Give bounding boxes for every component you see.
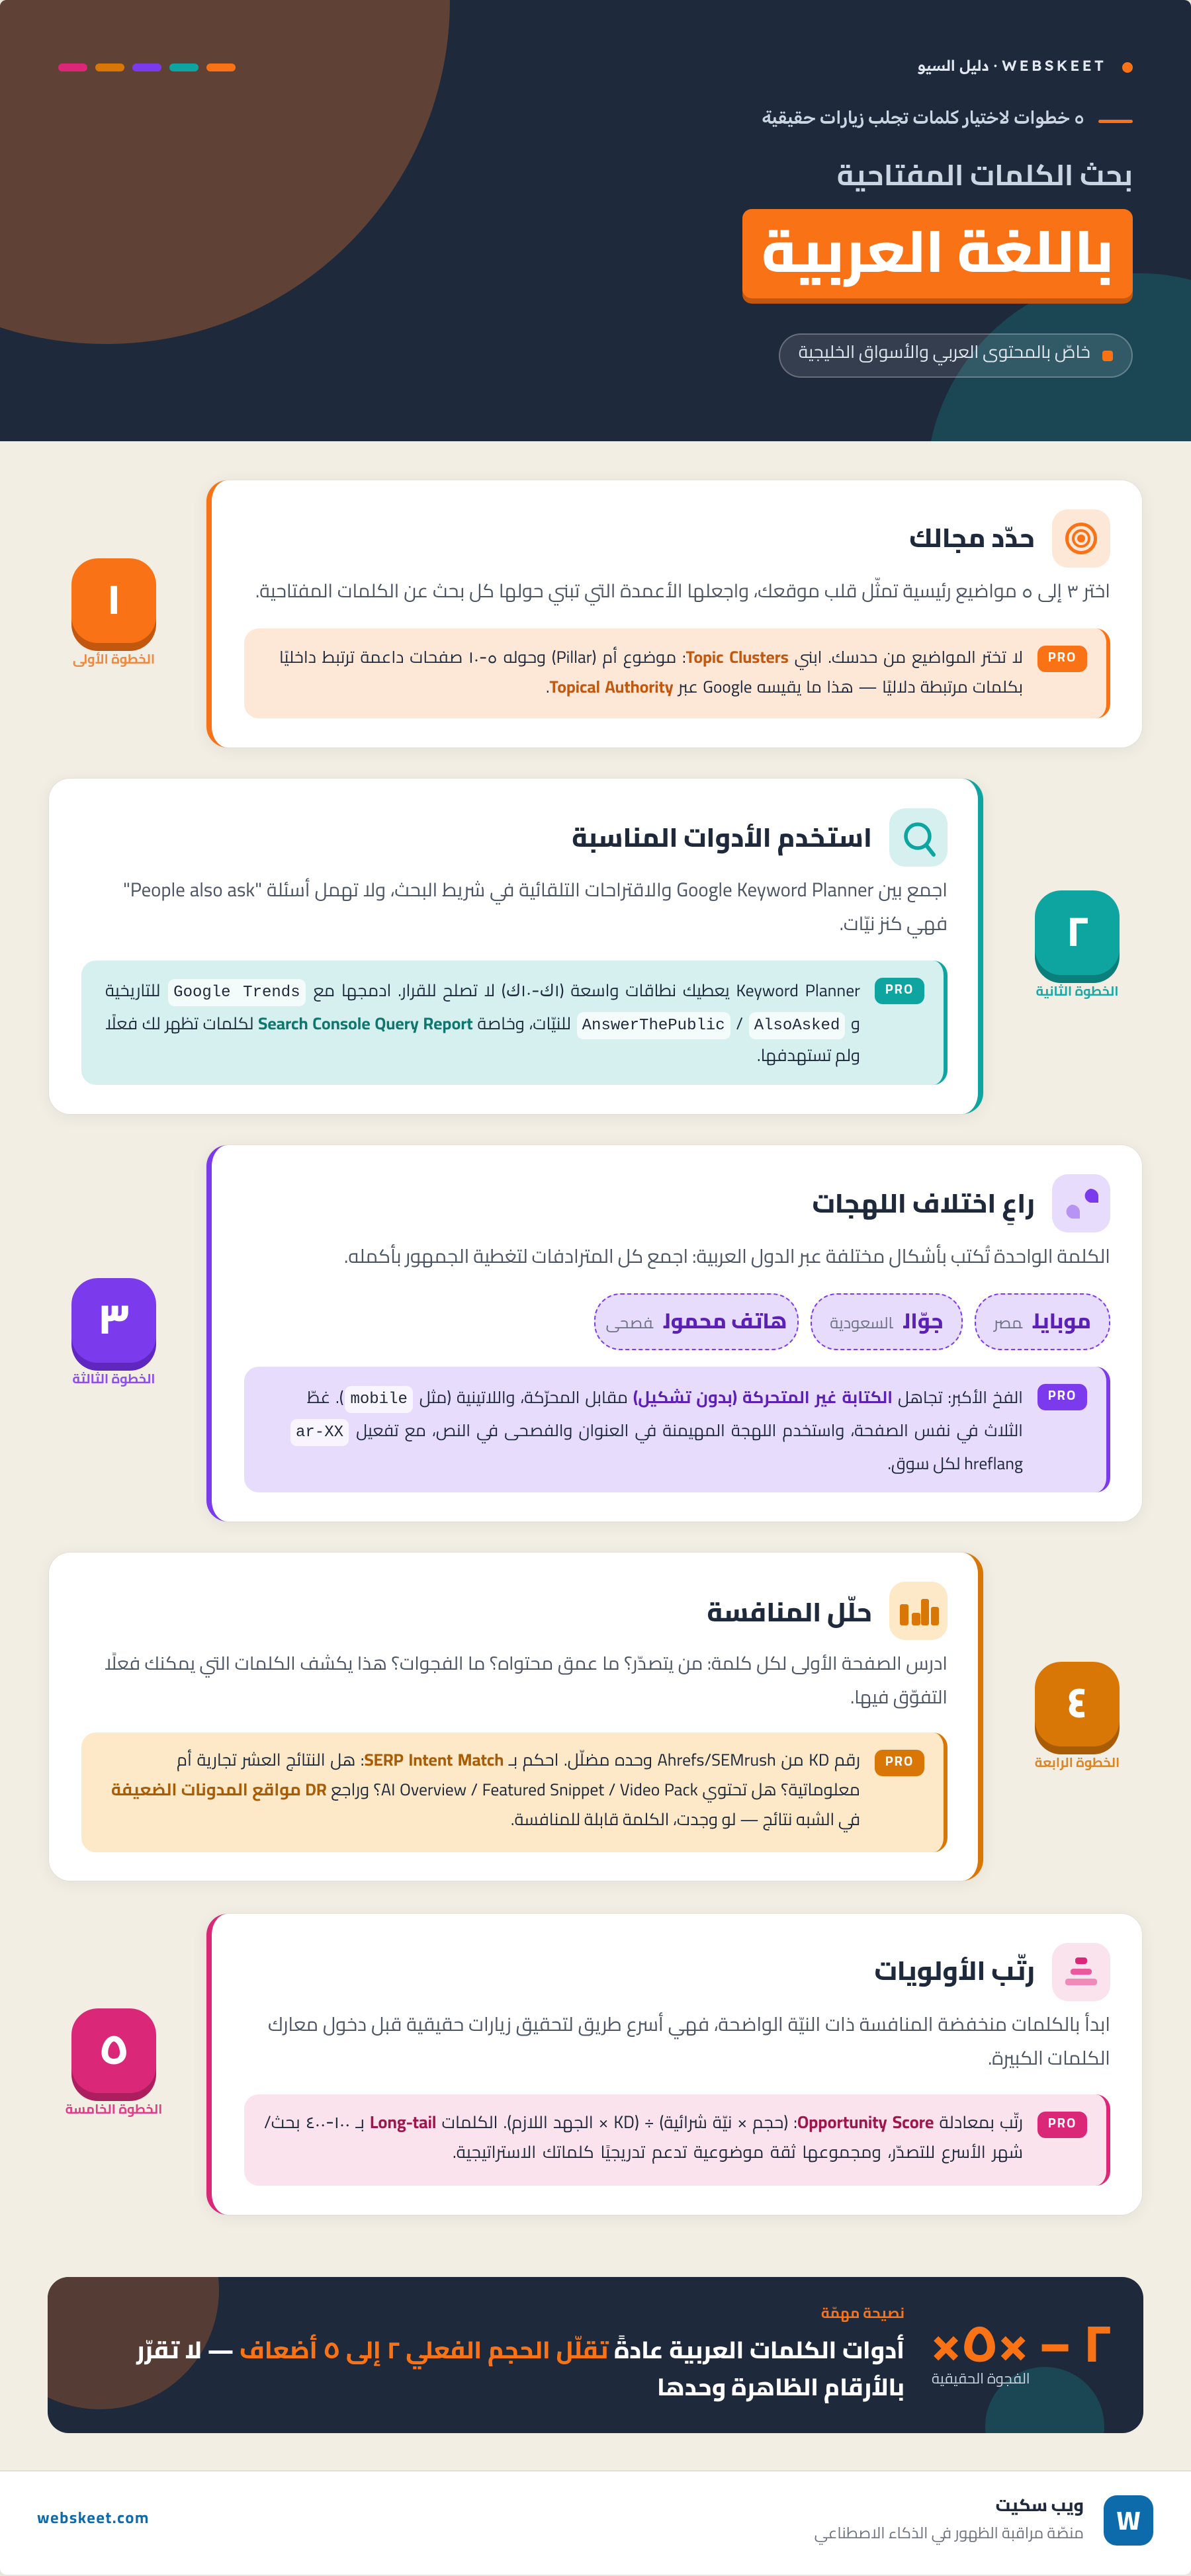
- step description: اجمع بين Google Keyword Planner والاقتراحات التلقائية في شريط البحث، ولا تهمل أسئلة "People also ask": [123, 872, 948, 908]
- step label: الخطوة الثالثة: [72, 1367, 155, 1391]
- pro text: و AlsoAsked / AnswerThePublic للنيّات، وخاصة Search Console Query Report لكلمات تظهر لك فعلًا: [105, 1008, 860, 1039]
- step description: اختر ٣ إلى ٥ مواضيع رئيسية تمثّل قلب موقعك، واجعلها الأعمدة التي تبني حولها كل بحث عن الكلمات المفتاحية.: [255, 574, 1110, 609]
- chip: Egypt: موبايلمصر: [994, 1301, 1091, 1341]
- step label: الخطوة الثانية: [1036, 979, 1119, 1004]
- step description: [123, 872, 948, 941]
- step title: حلّل المنافسة: [707, 1587, 872, 1637]
- title highlight box: باللغة العربية: [762, 196, 1114, 306]
- pro tag: PRO: [885, 1749, 914, 1774]
- pro tag: [1037, 1384, 1087, 1410]
- title line one: بحث الكلمات المفتاحية: [837, 148, 1133, 202]
- step description: [105, 1646, 948, 1715]
- header panel: [0, 0, 1191, 441]
- logo: W: [1116, 2495, 1141, 2545]
- pro tag: [1037, 2112, 1087, 2138]
- number: ٣: [97, 1279, 130, 1358]
- panel: step 1: [206, 480, 1142, 748]
- step 1 badge: [71, 558, 156, 671]
- callout banner: [48, 2277, 1143, 2433]
- icon: priority pyramid: [1052, 1943, 1110, 2001]
- callout text: [136, 2327, 904, 2409]
- step label: الخطوة الأولى: [73, 647, 155, 671]
- callout text: بالأرقام الظاهرة وحدها: [657, 2364, 904, 2409]
- decorative circle: teal: [985, 2367, 1104, 2486]
- step description: ادرس الصفحة الأولى لكل كلمة: من يتصدّر؟ ما عمق محتواه؟ ما الفجوات؟ هذا يكشف الكلمات التي يمكنك فعلًا: [105, 1646, 948, 1681]
- pro text: رقم KD من Ahrefs/SEMrush وحده مضلّل. احكم بـ SERP Intent Match: هل النتائج العشر تجارية أم: [177, 1744, 860, 1776]
- pro text: لا تختر المواضيع من حدسك. ابني Topic Clusters: موضوع أم (Pillar) وحوله ٥-١٠ صفحات داعمة ترتبط داخليًا: [279, 641, 1023, 673]
- pro text: في الشبه نتائج — لو وجدت، الكلمة قابلة للمنافسة.: [511, 1803, 860, 1835]
- chip: Saudi: [811, 1293, 963, 1350]
- colour step bars: [58, 64, 236, 71]
- pro text: الفخ الأكبر: تجاهل الكتابة غير المتحركة (بدون تشكيل) مقابل المحرّكة، واللاتينية (مثل mobile). غطّ: [307, 1381, 1023, 1413]
- logo: [1104, 2495, 1153, 2546]
- pro tip: [244, 2094, 1110, 2186]
- step description: الكلمة الواحدة تُكتب بأشكال مختلفة عبر الدول العربية: اجمع كل المترادفات لتغطية الجمهور بأكمله.: [344, 1238, 1110, 1274]
- step title: استخدم الأدوات المناسبة: [572, 812, 872, 862]
- step 5 badge: [66, 2008, 162, 2122]
- pro text: بكلمات مرتبطة دلاليًا — هذا ما يقيسه Google عبر Topical Authority.: [546, 671, 1023, 703]
- pro text: شهر الأسرع للتصدّر، ومجموعها ثقة موضوعية تدعم تدريجيًا كلماتك الاستراتيجية.: [453, 2135, 1023, 2168]
- panel: step 5: [206, 1914, 1142, 2215]
- pro tag: [1037, 646, 1087, 672]
- panel: step 2: [49, 779, 983, 1114]
- pro tip: [244, 628, 1110, 718]
- pro tag: [875, 978, 924, 1004]
- pro tip: [244, 1367, 1110, 1492]
- chip: Saudi: جوّالالسعودية: [830, 1301, 944, 1341]
- footer: [0, 2470, 1191, 2575]
- pro text: [290, 1381, 1023, 1479]
- pro tag: PRO: [1048, 2111, 1077, 2135]
- brand tagline: منصّة مراقبة الظهور في الذكاء الاصطناعي: [815, 2518, 1084, 2548]
- step 4 badge: [1035, 1662, 1120, 1775]
- number: [71, 2008, 156, 2093]
- eyebrow: brand and guide label: [918, 56, 1133, 75]
- number: ٢: [1065, 891, 1089, 970]
- icon: bar chart: [889, 1582, 948, 1640]
- pro text: [279, 641, 1023, 703]
- icon: target: [1052, 509, 1110, 568]
- pro text: الثلاث في نفس الصفحة، واستخدم اللهجة المهيمنة في العنوان والفصحى في النص، مع تفعيل ar-XX: [296, 1414, 1023, 1446]
- pro tag: PRO: [1048, 645, 1077, 669]
- pro text: hreflang لكل سوق.: [887, 1447, 1023, 1479]
- website url: webskeet.com: [37, 2503, 150, 2532]
- step description: ابدأ بالكلمات منخفضة المنافسة ذات النيّة الواضحة، فهي أسرع طريق لتحقيق زيارات حقيقية قبل دخول معارك: [268, 2006, 1110, 2042]
- pro tag: PRO: [1048, 1383, 1077, 1408]
- stat label: الفجوة الحقيقية: [932, 2364, 1030, 2392]
- number: [1035, 1662, 1120, 1746]
- chip: Fusha: [594, 1293, 799, 1350]
- number: ٥: [99, 2009, 129, 2088]
- pro text: ولم تستهدفها.: [757, 1039, 860, 1071]
- number: [71, 558, 156, 643]
- big stat: ٢ – ×٥×: [931, 2293, 1112, 2392]
- pro text: Keyword Planner يعطيك نطاقات واسعة (١ك-١٠ك) لا تصلح للقرار. ادمجها مع Google Trends للتاريخية: [105, 974, 860, 1006]
- number: ١: [106, 559, 122, 638]
- decorative circle: brown: [0, 2171, 219, 2409]
- accent line: [1098, 120, 1133, 123]
- step description: التفوّق فيها.: [850, 1680, 948, 1715]
- callout eyebrow: نصيحة مهمّة: [821, 2299, 904, 2327]
- subtitle text: ٥ خطوات لاختيار كلمات تجلب زيارات حقيقية: [762, 107, 1084, 128]
- pill text: خاصّ بالمحتوى العربي والأسواق الخليجية: [799, 335, 1090, 368]
- step title: رتّب الأولويات: [874, 1946, 1035, 1995]
- icon: orange dot: [1122, 62, 1133, 73]
- step description: [268, 2006, 1110, 2076]
- pro text: رتّب بمعادلة Opportunity Score: (حجم × نيّة شرائية) ÷ (KD × الجهد اللازم). الكلمات Long-tail بـ ١٠٠-٤٠٠ بحث/: [264, 2106, 1023, 2138]
- step 2 badge: [1035, 890, 1120, 1004]
- pro text: معلوماتية؟ هل تحتوي AI Overview / Featured Snippet / Video Pack؟ وراجع DR مواقع المدونات الضعيفة: [111, 1774, 860, 1805]
- step description: فهي كنز نيّات.: [840, 906, 948, 941]
- decorative circle: brown: [0, 0, 450, 344]
- step title: راعِ اختلاف اللهجات: [813, 1178, 1035, 1228]
- step title: حدّد مجالك: [909, 513, 1035, 562]
- audience pill: [779, 333, 1133, 378]
- pro text: [111, 1744, 860, 1835]
- chip: Egypt: [975, 1293, 1110, 1350]
- pro tip: [81, 1733, 948, 1852]
- step 3 badge: [71, 1278, 156, 1391]
- pro text: [105, 974, 860, 1071]
- panel: step 3: [206, 1145, 1142, 1522]
- pro tag: [875, 1750, 924, 1776]
- icon: speech bubbles: [1052, 1174, 1110, 1232]
- subtitle with accent line: [762, 107, 1133, 128]
- icon: search: [889, 808, 948, 867]
- panel: step 4: [49, 1553, 983, 1881]
- pro tag: PRO: [885, 977, 914, 1002]
- pro text: [264, 2106, 1023, 2168]
- decorative circle: teal: [926, 273, 1191, 697]
- number: ٤: [1067, 1662, 1087, 1742]
- step label: الخطوة الرابعة: [1035, 1750, 1120, 1775]
- brand name: ويب سكيت: [996, 2489, 1084, 2521]
- eyebrow text: WEBSKEET · دليل السيو: [918, 56, 1106, 75]
- number: [1035, 890, 1120, 975]
- number: [71, 1278, 156, 1363]
- step description: الكلمات الكبيرة.: [988, 2039, 1110, 2076]
- icon: orange square: [1102, 351, 1113, 361]
- chip: Fusha: هاتف محمولفصحى: [606, 1301, 787, 1341]
- pro tip: [81, 961, 948, 1085]
- callout text: أدوات الكلمات العربية عادةً تقلّل الحجم الفعلي ٢ إلى ٥ أضعاف — لا تقرّر: [136, 2327, 904, 2372]
- step label: الخطوة الخامسة: [66, 2097, 162, 2122]
